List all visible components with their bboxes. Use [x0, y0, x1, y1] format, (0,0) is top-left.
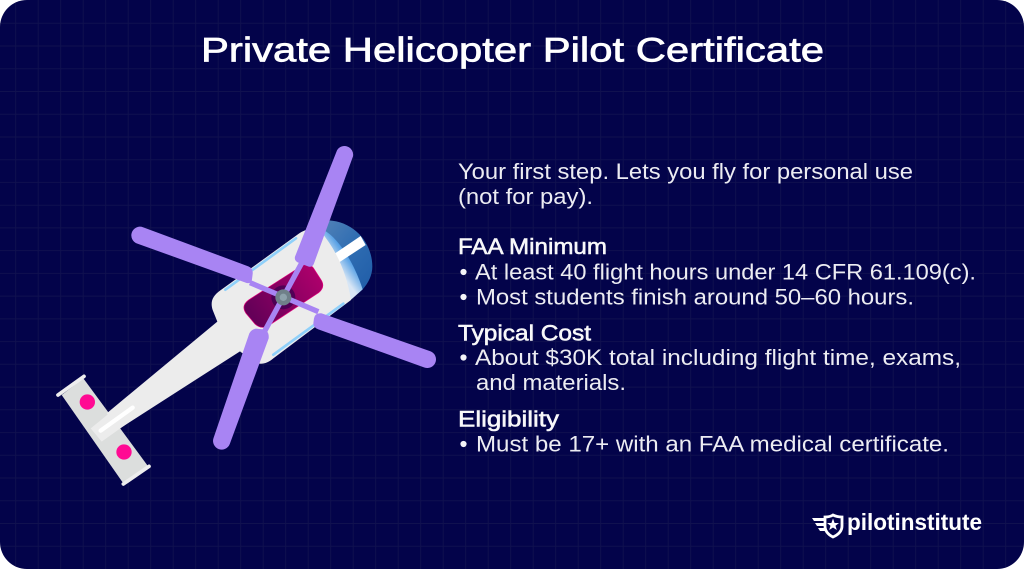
section: FAA Minimum: At least 40 flight hours under 14 CFR 61.109(c).	[475, 260, 976, 284]
rotor hub	[275, 289, 291, 305]
icon: winged shield	[812, 515, 842, 537]
rotor hub shadow	[271, 285, 295, 309]
side window strips	[225, 238, 296, 290]
section: Typical Cost: About $30K total including flight time, exams,	[475, 345, 961, 370]
intro text	[458, 159, 913, 209]
section: Eligibility: Eligibility	[458, 406, 560, 432]
section: Eligibility	[458, 406, 949, 456]
intro text: Your first step. Lets you fly for personal use	[458, 159, 913, 184]
tail stabilizer	[58, 376, 149, 484]
intro text: (not for pay).	[458, 184, 593, 209]
tail crossbar	[91, 408, 133, 442]
section: FAA Minimum: FAA Minimum	[458, 234, 607, 259]
section: Typical Cost: and materials.	[476, 370, 626, 395]
section: FAA Minimum: Most students finish around 50–60 hours.	[476, 284, 914, 310]
section: FAA Minimum	[458, 234, 976, 310]
section: Eligibility: Must be 17+ with an FAA medical certificate.	[476, 432, 949, 456]
cockpit window	[244, 265, 323, 327]
illustration: helicopter top view	[58, 146, 436, 484]
logo: Pilot Institute: pilotinstitute	[847, 509, 982, 535]
section: Typical Cost	[458, 320, 961, 395]
fuselage and tail boom	[107, 229, 351, 428]
rotor blades	[131, 146, 436, 450]
title: Private Helicopter Pilot Certificate	[201, 32, 824, 70]
section: Typical Cost: Typical Cost	[458, 320, 592, 346]
nose dome	[307, 220, 372, 302]
